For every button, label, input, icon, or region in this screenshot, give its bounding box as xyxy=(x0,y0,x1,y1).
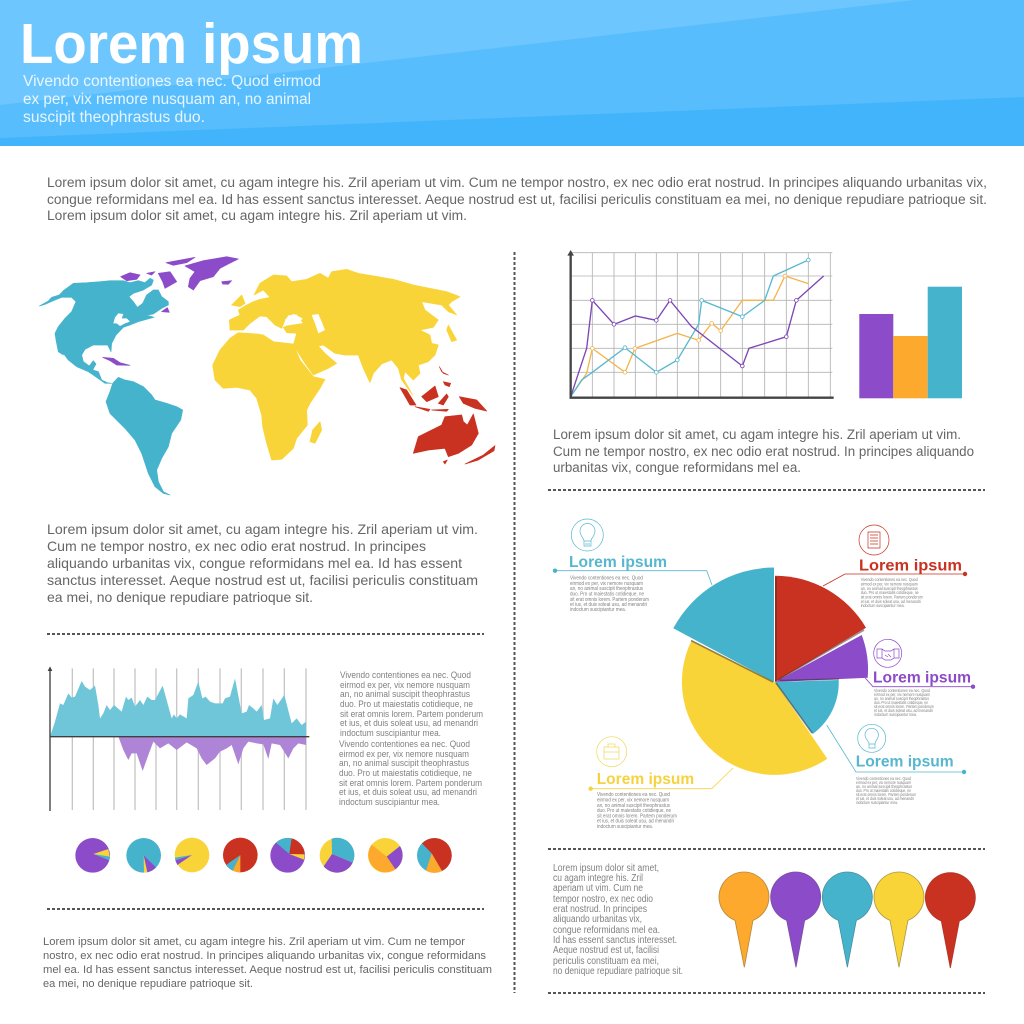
bottom left paragraph: ea mei, no denique repudiare patrioque sit. xyxy=(43,978,253,990)
purple pin xyxy=(771,872,821,967)
callout: teal bottom: Vivendo contentiones ea nec. Quod xyxy=(856,776,911,782)
callout: teal bottom: Lorem ipsum xyxy=(856,754,954,771)
left paragraph: Cum ne tempor nostro, ex nec odio erat nostrud. In principes xyxy=(47,538,426,554)
callout: teal bottom xyxy=(827,724,966,806)
orange pin xyxy=(719,872,769,967)
right paragraph: Lorem ipsum dolor sit amet, cu agam integre his. Zril aperiam ut vim. xyxy=(553,427,961,442)
callout: purple: an, no animal suscipit theophrastus xyxy=(874,696,929,702)
callout: yellow: indoctum suscipiantur mea. xyxy=(597,824,653,830)
slice shadows xyxy=(691,577,864,733)
axes xyxy=(571,253,834,398)
callout: teal top: sit erat omnis lorem. Partem ponderum xyxy=(570,597,649,603)
red pin xyxy=(925,873,975,968)
callout: purple: Vivendo contentiones ea nec. Quod xyxy=(874,688,930,694)
mini pie 6 xyxy=(320,838,354,873)
positive area xyxy=(50,678,306,737)
area chart notes: eirmod ex per, vix nemore nusquam xyxy=(340,680,470,690)
area chart notes: an, no animal suscipit theophrastus xyxy=(339,758,470,768)
inland seas xyxy=(285,314,325,333)
mini pie 8 xyxy=(417,838,452,873)
area chart notes: eirmod ex per, vix nemore nusquam xyxy=(339,749,469,759)
pin paragraph: no denique repudiare patrioque sit. xyxy=(553,966,683,977)
callout: purple: duo. Pro ut maiestatis cotidieque, ne xyxy=(874,700,928,706)
callout: purple: Lorem ipsum xyxy=(873,670,971,687)
dividers xyxy=(47,252,985,993)
bottom left paragraph xyxy=(43,936,492,990)
left paragraph: Lorem ipsum dolor sit amet, cu agam integre his. Zril aperiam ut vim. xyxy=(47,521,478,537)
intro paragraph: Lorem ipsum dolor sit amet, cu agam integre his. Zril aperiam ut vim. xyxy=(47,208,467,223)
callout: teal top: et ius, et duis soleat usu, ad menandri xyxy=(570,602,647,608)
callout: yellow: an, no animal suscipit theophrastus xyxy=(597,803,670,809)
callout: teal bottom: indoctum suscipiantur mea. xyxy=(856,800,898,806)
callout: teal bottom: et ius, et duis soleat usu, ad menandri xyxy=(856,796,914,802)
madagascar xyxy=(310,422,322,443)
callout: yellow: Vivendo contentiones ea nec. Quod xyxy=(597,792,670,798)
world map xyxy=(39,257,495,495)
callout: teal bottom: an, no animal suscipit theophrastus xyxy=(856,784,912,790)
right paragraph: urbanitas vix, congue reformidans mel ea. xyxy=(553,460,801,475)
intro paragraph: Lorem ipsum dolor sit amet, cu agam integre his. Zril aperiam ut vim. Cum ne tempor nostro, ex nec odio erat nostrud. In principes aliquando urbanitas vix, xyxy=(47,175,987,190)
pin paragraph: Aeque nostrud est ut, facilisi xyxy=(553,945,659,956)
yellow pin xyxy=(874,872,924,967)
orange line xyxy=(571,276,808,397)
title: Lorem ipsum xyxy=(20,12,363,76)
mini pie 1 xyxy=(75,838,110,873)
large teal slice xyxy=(673,568,774,682)
callout: red: eirmod ex per, vix nemore nusquam xyxy=(861,582,918,588)
area chart notes: duo. Pro ut maiestatis cotidieque, ne xyxy=(340,699,473,709)
area chart xyxy=(48,666,309,811)
pin paragraph: periculis constituam ea mei, xyxy=(553,956,659,967)
pin paragraph: cu agam integre his. Zril xyxy=(553,873,643,884)
great lakes xyxy=(113,313,130,326)
mini pie 3 xyxy=(175,838,209,872)
teal pin xyxy=(822,872,872,967)
callout: purple: sit erat omnis lorem. Partem ponderum xyxy=(874,704,934,710)
mini pie 7 xyxy=(368,838,403,873)
bottom left paragraph: Lorem ipsum dolor sit amet, cu agam integre his. Zril aperiam ut vim. Cum ne tempor xyxy=(43,936,465,948)
callout: red: et ius, et duis soleat usu, ad menandri xyxy=(861,599,921,605)
callout: red: duo. Pro ut maiestatis cotidieque, ne xyxy=(861,590,919,596)
callout: teal bottom: duo. Pro ut maiestatis cotidieque, ne xyxy=(856,788,911,794)
small teal slice xyxy=(775,680,839,734)
map pins xyxy=(719,872,975,968)
callout: yellow: et ius, et duis soleat usu, ad menandri xyxy=(597,818,674,824)
pin paragraph xyxy=(553,863,683,977)
callout: teal bottom: eirmod ex per, vix nemore nusquam xyxy=(856,780,911,786)
area chart notes: indoctum suscipiantur mea. xyxy=(340,728,441,738)
intro paragraph: congue reformidans mel ea. Id has essent sanctus interesset. Aeque nostrud est ut, facilisi periculis constituam ea mei, no denique repudiare patrioque sit. xyxy=(47,192,987,207)
bar chart xyxy=(859,287,962,398)
area chart notes: Vivendo contentiones ea nec. Quod xyxy=(339,739,470,749)
callout: red: indoctum suscipiantur mea. xyxy=(861,603,905,609)
purple slice xyxy=(775,635,868,682)
pin paragraph: erat nostrud. In principes xyxy=(553,904,647,915)
line chart xyxy=(567,250,834,398)
oceania xyxy=(400,367,495,464)
mini pie 4 xyxy=(223,838,258,872)
area chart notes: sit erat omnis lorem. Partem ponderum xyxy=(340,709,483,719)
data markers xyxy=(590,258,810,374)
subtitle: suscipit theophrastus duo. xyxy=(23,109,205,126)
pin paragraph: tempor nostro, ex nec odio xyxy=(553,894,653,905)
right paragraph xyxy=(553,427,974,475)
callout: teal top: indoctum suscipiantur mea. xyxy=(570,607,626,613)
icon: document xyxy=(859,525,889,555)
left paragraph: ea mei, no denique repudiare patrioque sit. xyxy=(47,589,313,605)
area chart notes: et ius, et duis soleat usu, ad menandri xyxy=(339,787,477,797)
eurasia xyxy=(229,269,460,395)
pin paragraph: Id has essent sanctus interesset. xyxy=(553,935,677,946)
callout: red xyxy=(823,525,967,609)
area chart notes: indoctum suscipiantur mea. xyxy=(339,797,440,807)
callout: teal top: duo. Pro ut maiestatis cotidieque, ne xyxy=(570,592,644,598)
callout: red: an, no animal suscipit theophrastus xyxy=(861,586,918,592)
subtitle xyxy=(23,73,321,126)
red slice xyxy=(775,576,866,682)
callout: yellow: eirmod ex per, vix nemore nusquam xyxy=(597,798,669,804)
africa xyxy=(213,333,325,460)
intro paragraph xyxy=(47,175,987,223)
negative area xyxy=(118,737,306,771)
callout: yellow: duo. Pro ut maiestatis cotidieque, ne xyxy=(597,808,671,814)
mini pie 2 xyxy=(126,838,161,873)
callout: red: Vivendo contentiones ea nec. Quod xyxy=(861,577,918,583)
subtitle: Vivendo contentiones ea nec. Quod eirmod xyxy=(23,73,321,90)
yellow slice xyxy=(682,640,827,775)
icon: briefcase xyxy=(597,737,627,767)
mini pie 5 xyxy=(270,838,305,873)
callout: purple xyxy=(865,639,975,718)
callout: purple: et ius, et duis soleat usu, ad menandri xyxy=(874,708,933,714)
area chart notes: sit erat omnis lorem. Partem ponderum xyxy=(339,778,482,788)
large pie chart xyxy=(673,568,868,775)
icon: light bulb xyxy=(571,519,603,551)
pin paragraph: congue reformidans mel ea. xyxy=(553,925,660,936)
callout: teal top: an, no animal suscipit theophrastus xyxy=(570,586,643,592)
subtitle: ex per, vix nemore nusquam an, no animal xyxy=(23,91,311,108)
area chart notes: et ius, et duis soleat usu, ad menandri xyxy=(340,718,478,728)
icon: handshake xyxy=(874,639,902,667)
callout: teal top: Vivendo contentiones ea nec. Quod xyxy=(570,576,643,582)
pin paragraph: Lorem ipsum dolor sit amet, xyxy=(553,863,659,874)
callout: teal bottom: sit erat omnis lorem. Partem ponderum xyxy=(856,792,916,798)
left paragraph: sanctus interesset. Aeque nostrud est ut, facilisi periculis constituam xyxy=(47,572,478,588)
callout: red: sit erat omnis lorem. Partem ponderum xyxy=(861,594,923,600)
greenland and arctic islands xyxy=(103,257,238,365)
right paragraph: Cum ne tempor nostro, ex nec odio erat nostrud. In principes aliquando xyxy=(553,444,974,459)
teal line xyxy=(571,260,808,397)
area chart notes: an, no animal suscipit theophrastus xyxy=(340,689,471,699)
callout: teal top: eirmod ex per, vix nemore nusquam xyxy=(570,581,643,587)
south america xyxy=(106,377,183,495)
header banner xyxy=(0,0,1024,146)
bottom left paragraph: mel ea. Id has essent sanctus interesset. Aeque nostrud est ut, facilisi periculis constituam xyxy=(43,964,492,976)
british isles and japan xyxy=(232,295,457,342)
callout: yellow: Lorem ipsum xyxy=(597,771,694,788)
callout: purple: indoctum suscipiantur mea. xyxy=(874,712,917,718)
callout: yellow: sit erat omnis lorem. Partem ponderum xyxy=(597,814,677,820)
left paragraph xyxy=(47,521,478,605)
callout: teal top xyxy=(553,519,712,613)
area chart notes: duo. Pro ut maiestatis cotidieque, ne xyxy=(339,768,472,778)
icon: light bulb xyxy=(858,724,886,752)
callout: red: Lorem ipsum xyxy=(859,558,962,575)
area chart notes xyxy=(339,670,483,807)
north america xyxy=(39,278,168,383)
area chart notes: Vivendo contentiones ea nec. Quod xyxy=(340,670,471,680)
small pie row xyxy=(75,838,452,873)
callout: teal top: Lorem ipsum xyxy=(569,554,667,571)
axes xyxy=(50,668,309,811)
bottom left paragraph: nostro, ex nec odio erat nostrud. In principes aliquando urbanitas vix, congue reformidans xyxy=(43,950,487,962)
callout: purple: eirmod ex per, vix nemore nusquam xyxy=(874,692,930,698)
pin paragraph: aperiam ut vim. Cum ne xyxy=(553,883,643,894)
left paragraph: aliquando urbanitas vix, congue reformidans mel ea. Id has essent xyxy=(47,555,462,571)
purple line xyxy=(571,276,824,397)
callout: yellow xyxy=(588,737,733,830)
pin paragraph: aliquando urbanitas vix, xyxy=(553,914,642,925)
